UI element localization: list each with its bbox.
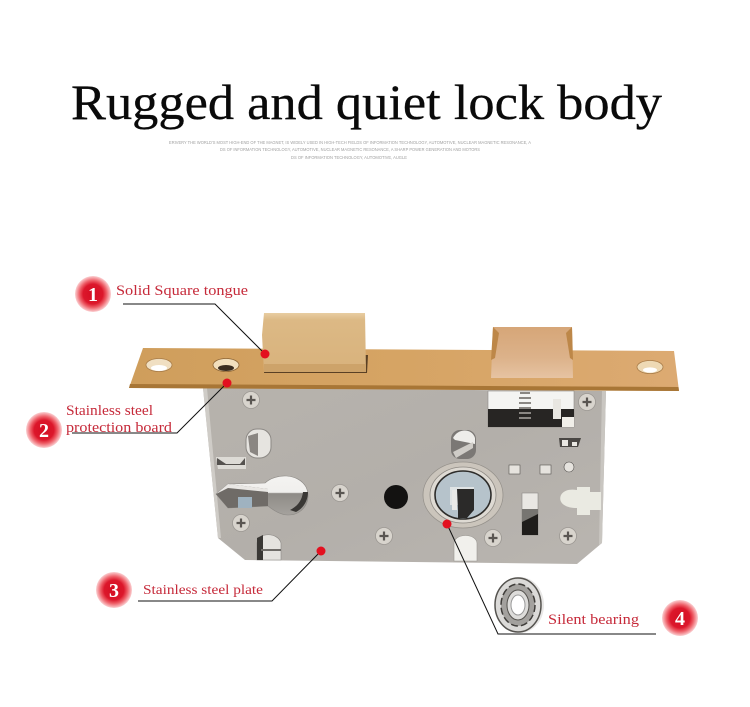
upper central slot	[451, 430, 476, 459]
latch tongue	[491, 327, 573, 378]
subtitle small text: ERIVERY THE WORLD'S MOST HIGH-END OF THE MAGNET, IS WIDELY USED IN HIGH-TECH FIELDS OF INFORMATION TECHNOLOGY, AUTOMOTIVE, NUCLEAR MAGNETIC RESONANCE, A	[169, 140, 532, 145]
lower right slot	[454, 536, 477, 561]
title: Rugged and quiet lock body	[71, 74, 662, 130]
callout 3: Stainless steel plate	[143, 583, 263, 598]
callout 1: 1	[88, 284, 98, 306]
plastic latch	[560, 487, 601, 515]
case cut-outs	[216, 391, 601, 561]
callout 4: 4	[675, 608, 685, 630]
stainless steel case	[203, 388, 606, 564]
latch window	[488, 391, 574, 427]
red marker dots	[222, 350, 452, 556]
screws	[242, 392, 260, 408]
callout 3	[96, 572, 263, 608]
face plate	[129, 348, 679, 391]
callout 3: 3	[109, 580, 119, 602]
leader line 2	[72, 383, 227, 433]
lock body illustration	[129, 313, 679, 564]
callout 2	[26, 403, 173, 448]
small windows	[559, 438, 581, 447]
vertical slot	[522, 493, 538, 535]
callout 4: Silent bearing	[548, 612, 639, 628]
subtitle small text: DS OF INFORMATION TECHNOLOGY, AUTOMOTIVE, NUCLEAR MAGNETIC RESONANCE, A SHARP POWER GENERATION AND MOTORS	[220, 147, 480, 152]
callout 1	[75, 276, 248, 312]
callout 2: 2	[39, 420, 49, 442]
square tongue	[262, 313, 368, 373]
subtitle small text: DS OF INFORMATION TECHNOLOGY, AUTOMOTIVE, AUGLE	[291, 155, 407, 160]
callout 1: Solid Square tongue	[116, 283, 248, 299]
left notch	[216, 457, 246, 469]
callout 2: Stainless steel	[66, 403, 153, 419]
upper left slot	[246, 429, 271, 458]
leader line 1	[123, 304, 265, 354]
small bearing illustration	[495, 577, 544, 633]
callout 2: protection board	[66, 420, 173, 436]
leader line 4	[447, 524, 656, 634]
lower left slot	[257, 535, 281, 560]
plate holes	[146, 358, 663, 374]
callout 4	[548, 600, 698, 636]
central round hole	[384, 485, 408, 509]
leader line 3	[138, 551, 321, 601]
cylinder keyhole	[216, 476, 308, 515]
subtitle small text	[169, 140, 532, 160]
spindle bearing	[423, 462, 503, 528]
